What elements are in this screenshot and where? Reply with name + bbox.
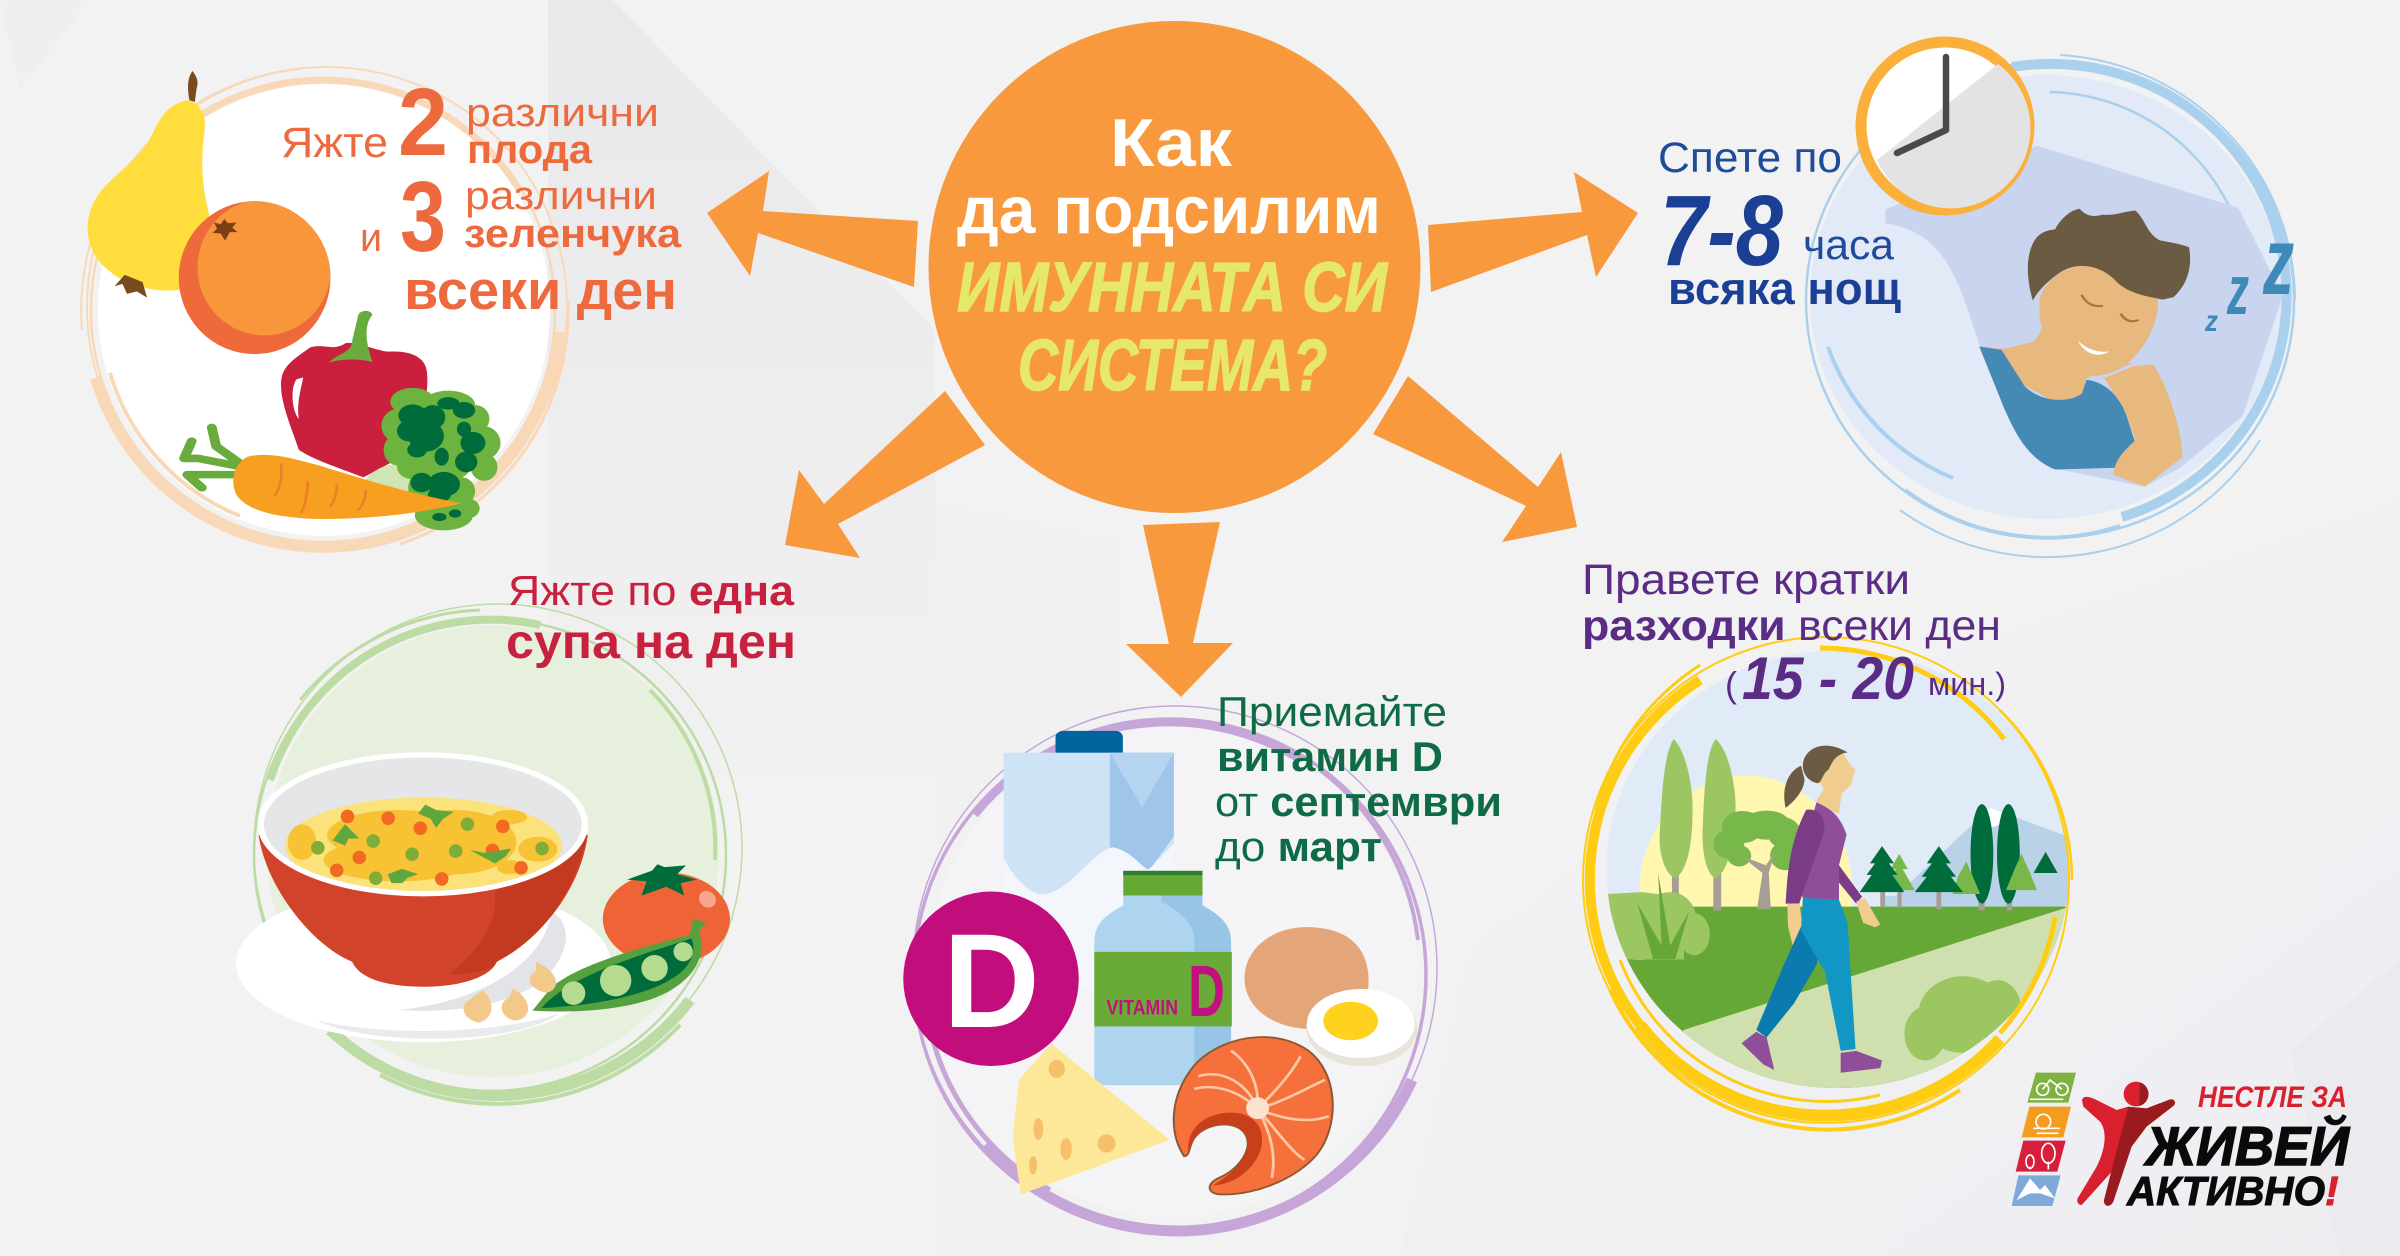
orange ring <box>81 67 568 548</box>
panel: vitamin D <box>903 688 1502 1231</box>
panel: sleep <box>1658 42 2295 557</box>
blue ring <box>1806 55 2295 557</box>
title: ИМУННАТА СИ <box>957 248 1388 326</box>
trees <box>1660 739 2058 910</box>
icon: eggs <box>1245 927 1417 1066</box>
icon: tomato <box>603 864 730 965</box>
text: soup: супа на ден <box>506 616 796 669</box>
person walking <box>1741 746 1882 1073</box>
text: walking: ( <box>1725 664 1737 705</box>
green ring <box>254 604 742 1104</box>
text: fruit and vegetables: плода <box>467 128 593 172</box>
text: sleep: часа <box>1803 221 1895 268</box>
text: fruit and vegetables: различни <box>466 91 659 135</box>
arrows from central circle <box>707 171 1638 697</box>
yellow ring <box>1583 637 2072 1130</box>
title <box>957 105 1388 406</box>
text: vitamin D: до март <box>1215 823 1382 870</box>
icon: z z z: z <box>2204 305 2218 338</box>
person <box>1979 209 2190 487</box>
illustration: fruit and vegetables <box>88 71 501 530</box>
arrow: to fruit and vegetables <box>707 171 918 287</box>
illustration: sleeping person <box>1886 146 2283 487</box>
icon: vitamin bottle: VITAMIN <box>1107 996 1178 1019</box>
text: walking <box>1582 556 2006 712</box>
text: fruit and vegetables: различни <box>465 174 657 218</box>
title: СИСТЕМА? <box>1018 326 1327 406</box>
text: fruit and vegetables: и <box>360 216 382 260</box>
text: fruit and vegetables: 3 <box>400 161 446 273</box>
icon: z z z <box>2204 208 2294 338</box>
arrow: to walking <box>1373 376 1577 542</box>
panel: walking <box>1582 564 2074 1132</box>
text: sleep: 7-8 <box>1660 175 1783 287</box>
logo text: ! <box>2325 1168 2339 1214</box>
pillow <box>1886 146 2283 487</box>
text: soup <box>506 567 796 669</box>
icon: pear <box>88 71 210 298</box>
text: fruit and vegetables: 2 <box>398 69 448 176</box>
icon: milk carton <box>1004 731 1174 989</box>
bowl <box>257 752 588 987</box>
logo: Nestle Live Active <box>2012 1073 2175 1206</box>
text: fruit and vegetables: зеленчука <box>464 212 682 256</box>
plate <box>236 885 611 1042</box>
logo text: АКТИВНО <box>2126 1168 2325 1214</box>
title: да подсилим <box>957 173 1381 248</box>
text: vitamin D: Приемайте <box>1217 688 1447 735</box>
arrow: to sleep <box>1428 172 1638 292</box>
arrow: to soup <box>785 391 985 558</box>
text: sleep: всяка нощ <box>1668 263 1901 314</box>
panel: soup <box>236 567 796 1104</box>
logo text <box>2126 1081 2350 1214</box>
icon: orange <box>179 199 331 354</box>
icon: salmon steak <box>1174 1037 1333 1194</box>
arrow: to vitamin D <box>1126 522 1233 697</box>
icon: z z z: z <box>2226 251 2249 329</box>
purple ring <box>913 706 1437 1231</box>
icon: chickpeas <box>464 962 556 1022</box>
icon: vitamin bottle: D <box>1188 951 1225 1032</box>
illustration: park scene with walker <box>1606 650 2070 1088</box>
park scene <box>1606 650 2070 1088</box>
bushes <box>1605 892 2021 1060</box>
text: walking: 15 - 20 <box>1742 645 1914 712</box>
title: Как <box>1110 105 1233 181</box>
central circle with title <box>928 21 1420 513</box>
icon: cheese <box>1013 1044 1170 1194</box>
icon: vitamin D badge <box>903 892 1079 1066</box>
logo text: НЕСТЛЕ ЗА <box>2198 1081 2347 1114</box>
icon: figure <box>2077 1082 2175 1206</box>
text: sleep: Спете по <box>1658 134 1842 182</box>
letter D in badge: D <box>943 907 1040 1056</box>
logo text: ЖИВЕЙ <box>2143 1114 2350 1177</box>
icon: clock <box>1861 42 2030 210</box>
text: walking: мин.) <box>1928 666 2006 702</box>
text: vitamin D <box>1215 688 1502 870</box>
icon: z z z: z <box>2262 208 2294 315</box>
text: walking: разходки всеки ден <box>1582 602 2001 650</box>
illustration: soup <box>236 752 730 1042</box>
text: vitamin D: от септември <box>1215 778 1502 825</box>
text: fruit and vegetables: всеки ден <box>404 259 677 321</box>
panel: fruit and vegetables <box>81 67 682 548</box>
icon: vitamin bottle <box>1094 871 1232 1085</box>
text: walking: Правете кратки <box>1582 556 1910 604</box>
text: fruit and vegetables: Яжте <box>281 119 388 167</box>
icon: broccoli <box>364 388 501 530</box>
illustration: vitamin D foods <box>903 731 1417 1194</box>
text: fruit and vegetables <box>281 69 682 321</box>
icon: red pepper <box>281 311 427 477</box>
text: soup: Яжте по една <box>508 567 795 614</box>
icon: carrot <box>184 427 462 519</box>
text: sleep <box>1658 134 1901 314</box>
icon: pea pod <box>532 919 706 1012</box>
icon: activity tiles <box>2012 1073 2076 1206</box>
text: vitamin D: витамин D <box>1217 733 1443 780</box>
